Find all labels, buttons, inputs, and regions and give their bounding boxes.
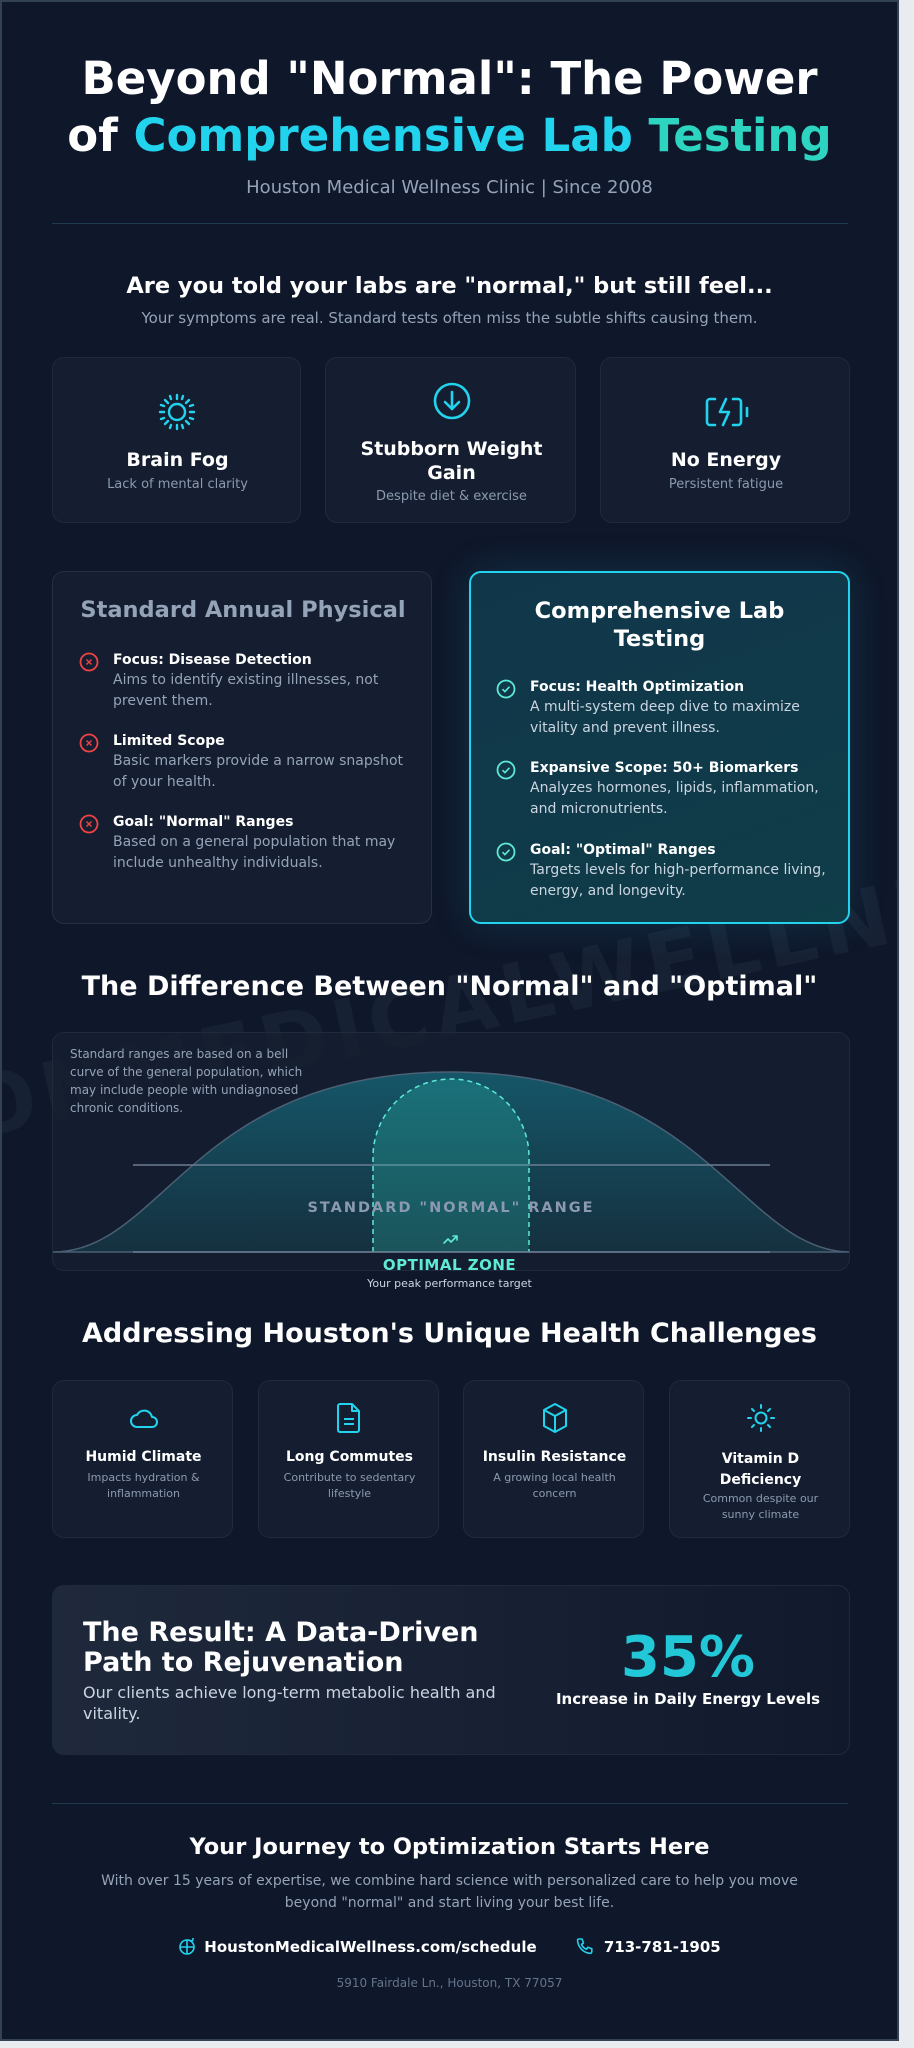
icon: down arrow circle <box>434 382 470 420</box>
chart note: Standard ranges are based on a bell curve of the general population, which may include people with undiagnosed chronic conditions. <box>70 1047 302 1115</box>
heading: comprehensive <box>535 598 784 652</box>
heading: houston challenges: Addressing Houston's Unique Health Challenges <box>82 1318 817 1349</box>
item: health optimization <box>496 679 800 736</box>
card: vitamin d: Vitamin D <box>722 1451 799 1467</box>
contact: website: HoustonMedicalWellness.com/schedule <box>204 1938 537 1956</box>
label: optimal zone: OPTIMAL ZONE <box>383 1256 516 1274</box>
title: of Comprehensive Lab Testing <box>67 109 832 162</box>
card: humid climate: Humid Climate <box>85 1449 202 1465</box>
item: health optimization: Focus: Health Optimization <box>530 679 744 695</box>
card: weight gain: Despite diet & exercise <box>376 489 527 504</box>
item: normal ranges: Goal: "Normal" Ranges <box>113 814 293 830</box>
card: long commutes: Contribute to sedentary lifestyle <box>284 1471 415 1500</box>
contact: phone: 713-781-1905 <box>604 1938 721 1956</box>
chart: bell curve <box>52 1032 850 1271</box>
symptoms heading: Are you told your labs are "normal," but still feel... <box>126 273 773 299</box>
item: limited scope: Basic markers provide a narrow snapshot of your health. <box>113 753 403 790</box>
panel: result <box>52 1585 850 1755</box>
item: disease detection: Aims to identify existing illnesses, not prevent them. <box>113 672 378 709</box>
panel: standard annual physical <box>52 571 432 924</box>
heading: normal vs optimal: The Difference Between "Normal" and "Optimal" <box>82 971 817 1002</box>
item: expansive scope <box>496 760 819 817</box>
panel: comprehensive lab testing <box>469 571 850 924</box>
card: brain fog <box>52 357 301 523</box>
card: weight gain <box>325 357 576 523</box>
subtitle: Houston Medical Wellness Clinic | Since 2008 <box>246 177 653 198</box>
icon: trending up <box>443 1235 458 1244</box>
result heading: Path to Rejuvenation <box>83 1647 404 1678</box>
icon: cube <box>543 1403 567 1433</box>
card: insulin resistance: A growing local health concern <box>493 1471 616 1500</box>
card: vitamin d: Deficiency <box>720 1472 801 1488</box>
heading: comprehensive: Comprehensive Lab <box>535 598 784 624</box>
card: vitamin d: Common despite our sunny climate <box>703 1492 818 1521</box>
text: Your peak performance target <box>367 1277 532 1290</box>
icon: battery <box>706 398 748 426</box>
heading: standard: Standard Annual Physical <box>80 597 406 623</box>
heading: comprehensive: Testing <box>614 626 705 652</box>
icon: brain fog <box>158 394 196 430</box>
card: weight gain: Stubborn Weight <box>361 438 542 460</box>
result heading <box>83 1617 478 1678</box>
item: limited scope <box>80 733 403 790</box>
stat: 35%: Increase in Daily Energy Levels <box>556 1690 820 1708</box>
address: 5910 Fairdale Ln., Houston, TX 77057 <box>337 1976 562 1990</box>
item: health optimization: A multi-system deep dive to maximize vitality and prevent illness. <box>530 699 800 736</box>
footer text: With over 15 years of expertise, we combine hard science with personalized care to help you move beyond "normal" and start living your best life. <box>101 1873 798 1911</box>
card: humid climate: Impacts hydration & inflammation <box>87 1471 200 1500</box>
card: no energy: Persistent fatigue <box>669 477 783 492</box>
card: long commutes <box>258 1380 439 1538</box>
icon: cloud <box>130 1410 158 1428</box>
label: standard normal range: STANDARD "NORMAL" RANGE <box>307 1200 595 1216</box>
title: Beyond "Normal": The Power <box>81 52 818 105</box>
card: no energy: No Energy <box>671 449 781 471</box>
item: optimal ranges: Targets levels for high-performance living, energy, and longevity. <box>530 862 826 899</box>
card: insulin resistance <box>463 1380 644 1538</box>
item: disease detection: Focus: Disease Detection <box>113 652 312 668</box>
stat: 35% <box>556 1625 820 1708</box>
card: humid climate <box>52 1380 233 1538</box>
card: vitamin d <box>669 1380 850 1538</box>
item: limited scope: Limited Scope <box>113 733 225 749</box>
title <box>67 52 832 162</box>
item: normal ranges <box>80 814 395 871</box>
footer heading: Your Journey to Optimization Starts Here <box>190 1834 709 1860</box>
card: weight gain: Gain <box>427 462 476 484</box>
item: expansive scope: Analyzes hormones, lipids, inflammation, and micronutrients. <box>530 780 819 817</box>
result text: Our clients achieve long-term metabolic health and vitality. <box>83 1683 496 1723</box>
item: expansive scope: Expansive Scope: 50+ Biomarkers <box>530 760 798 776</box>
icon: sun <box>747 1404 775 1432</box>
icon: document <box>337 1403 360 1433</box>
card: brain fog: Brain Fog <box>126 449 229 471</box>
card: insulin resistance: Insulin Resistance <box>483 1449 626 1465</box>
card: long commutes: Long Commutes <box>286 1449 413 1465</box>
card: no energy <box>600 357 850 523</box>
stat: 35%: 35% <box>621 1625 755 1690</box>
symptoms subheading: Your symptoms are real. Standard tests often miss the subtle shifts causing them. <box>142 309 757 327</box>
item: optimal ranges: Goal: "Optimal" Ranges <box>530 842 716 858</box>
item: disease detection <box>80 652 378 709</box>
card: brain fog: Lack of mental clarity <box>107 477 248 492</box>
contact info <box>179 1938 721 1956</box>
result heading: The Result: A Data-Driven <box>83 1617 478 1648</box>
item: normal ranges: Based on a general population that may include unhealthy individuals. <box>113 834 395 871</box>
item: optimal ranges <box>496 842 826 899</box>
